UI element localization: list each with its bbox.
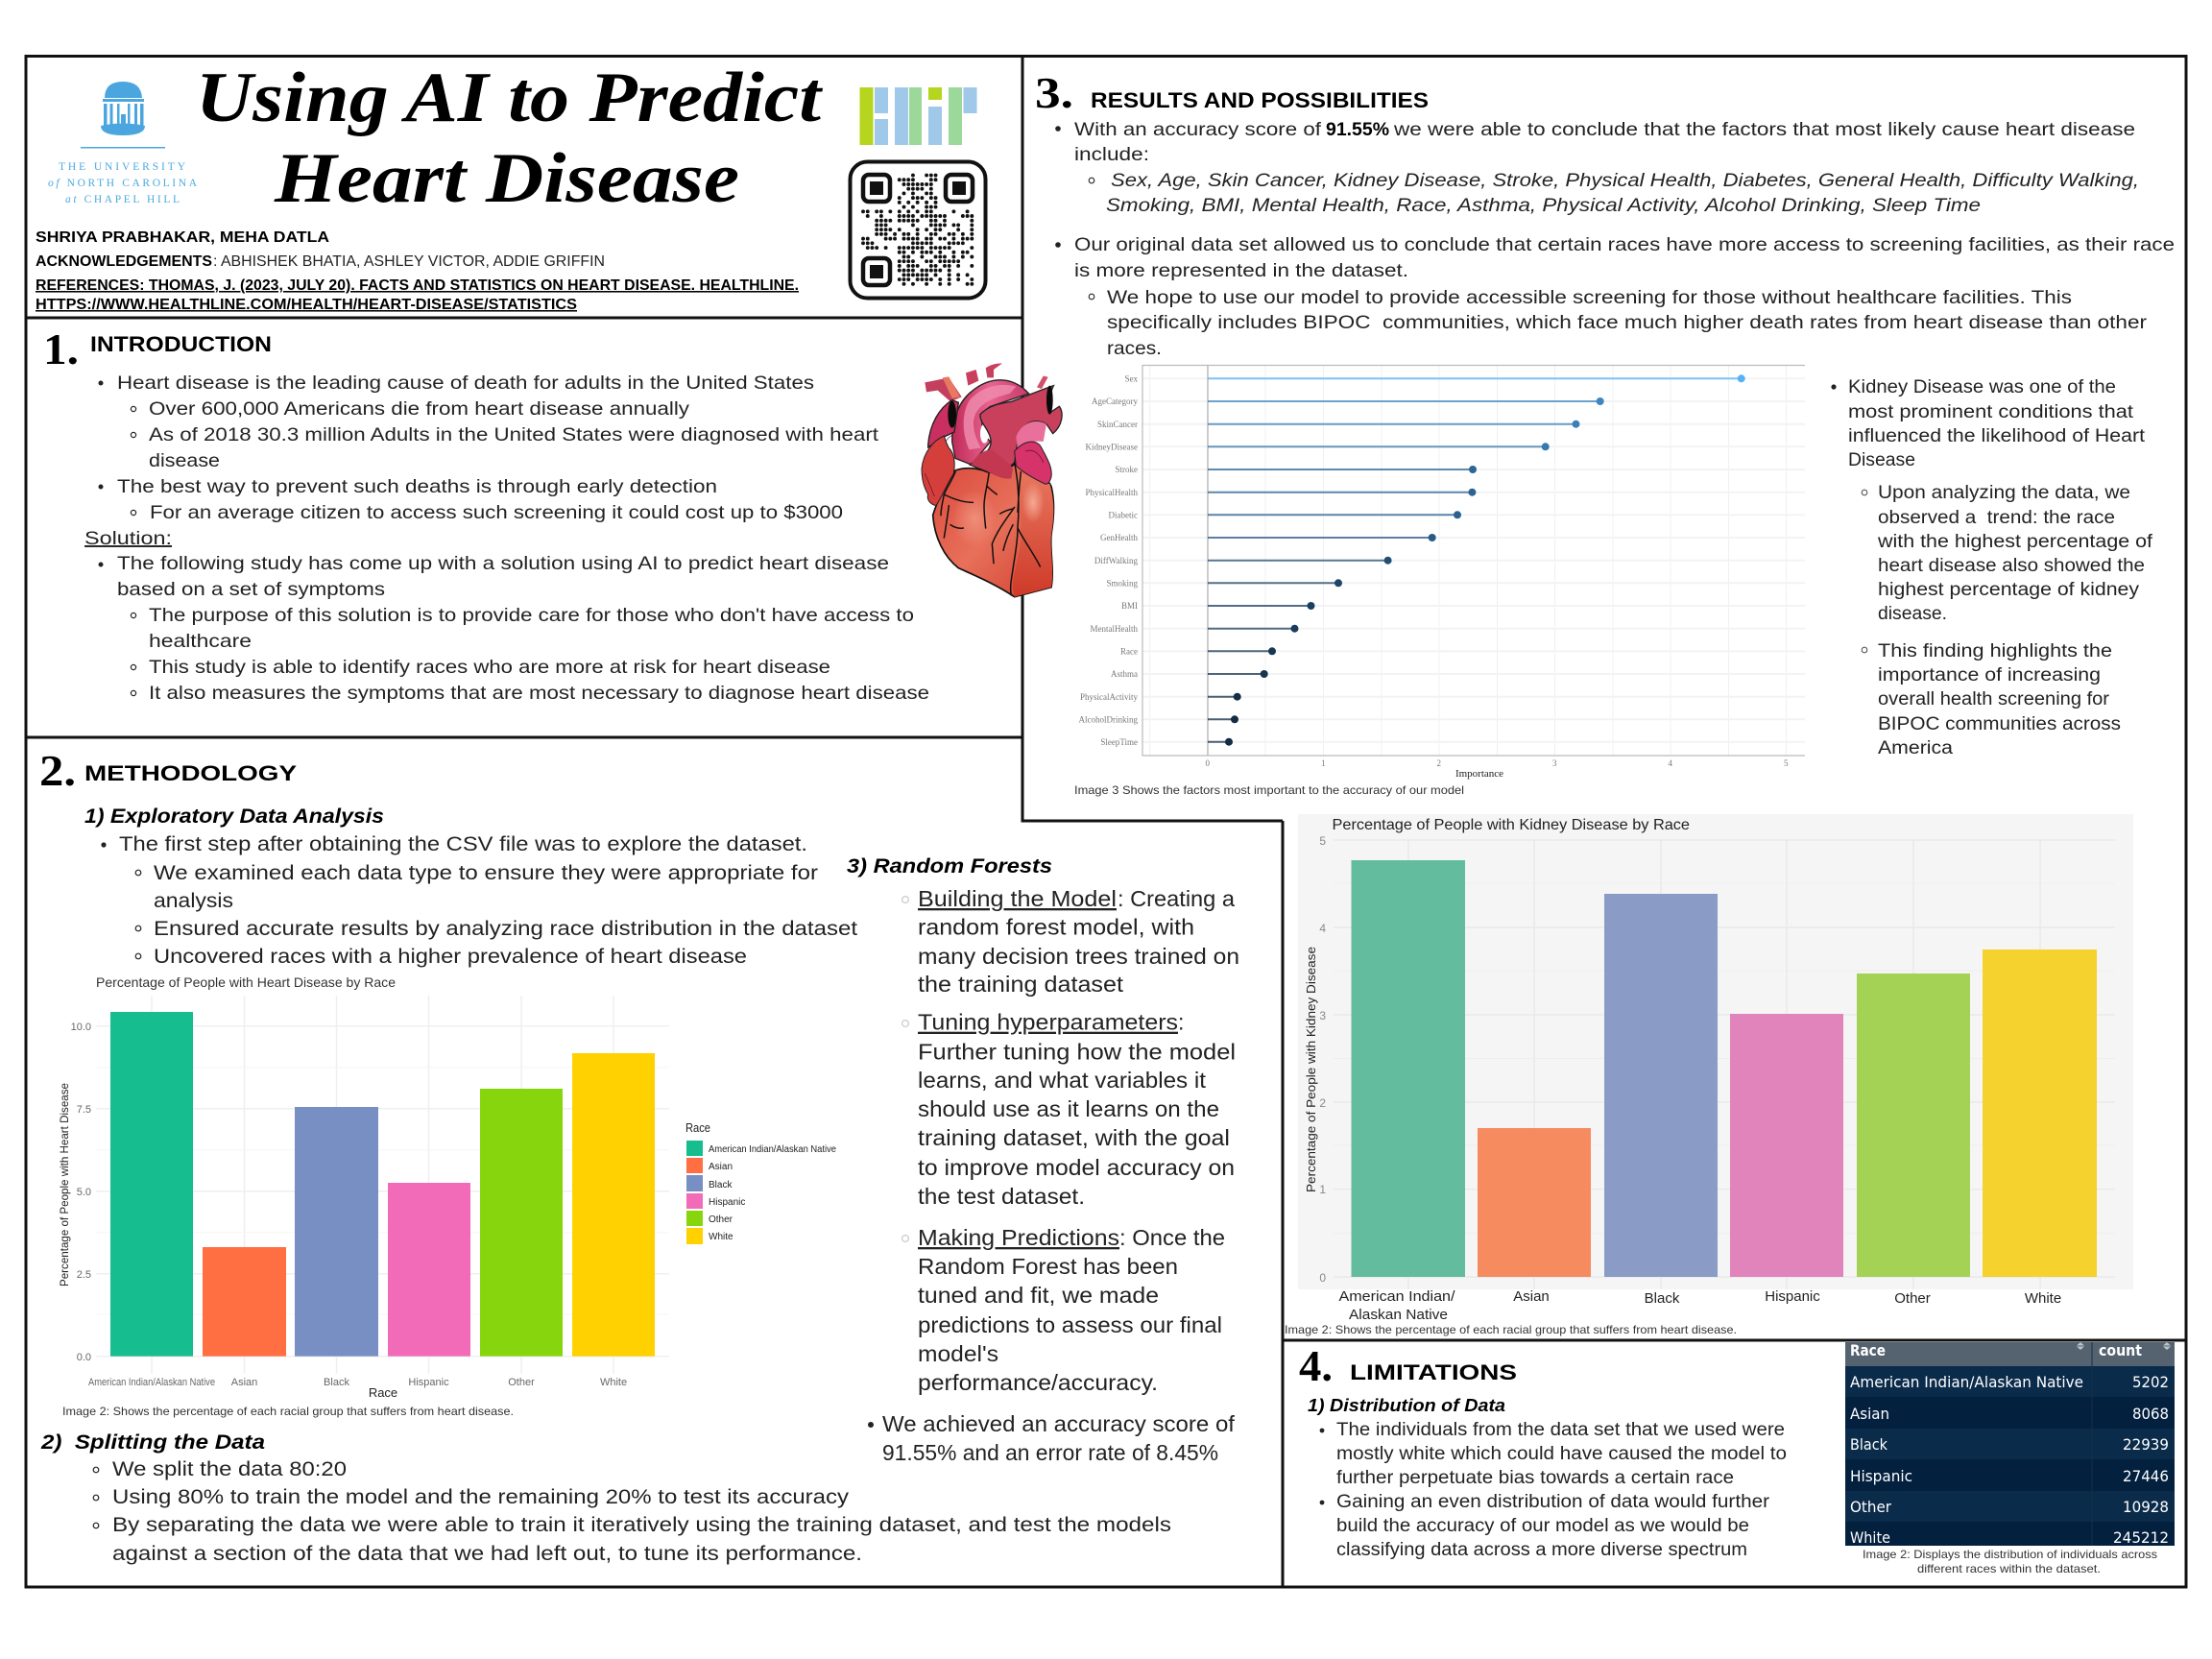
text block: results bullets: we were able to conclude that the factors that most likely cause heart disease — [1393, 119, 2135, 140]
text block: random forests bullets — [868, 886, 1239, 1465]
text block: splitting bullets: against a section of the data that we had left out, to tune its performance. — [112, 1542, 862, 1565]
text block: exploratory analysis bullets: Uncovered races with a higher prevalence of heart disease — [154, 945, 747, 968]
bar chart: heart disease by race: Race — [369, 1385, 397, 1400]
lollipop chart: feature importance: PhysicalHealth — [1085, 488, 1138, 497]
panel: introduction — [43, 325, 929, 704]
bar chart: kidney disease by race: Black — [1645, 1290, 1680, 1307]
lollipop chart: feature importance: GenHealth — [1100, 533, 1138, 542]
logo: UNC Old Well — [48, 82, 198, 205]
authors and references: REFERENCES: THOMAS, J. (2023, JULY 20). FACTS AND STATISTICS ON HEART DISEASE. HEALTHLINE. — [36, 277, 799, 294]
text block: random forests bullets: random forest model, with — [918, 914, 1194, 939]
text block: limitations bullets: further perpetuate bias towards a certain race — [1336, 1468, 1734, 1488]
subheading: random forests: 3) Random Forests — [847, 855, 1052, 878]
text block: introduction bullets: The following study has come up with a solution using AI to predict heart disease — [117, 553, 889, 574]
lollipop chart: feature importance: 1 — [1321, 758, 1325, 768]
bar chart: heart disease by race: American Indian/Alaskan Native — [88, 1377, 215, 1388]
lollipop chart: feature importance: 2 — [1436, 758, 1441, 768]
text block: results bullets: is more represented in the dataset. — [1074, 260, 1408, 281]
legend: White — [709, 1232, 733, 1242]
text block: kidney disease findings: observed a trend: the race — [1878, 508, 2115, 528]
text block: results bullets: specifically includes BIPOC communities, which face much higher death rates from heart disease than other — [1107, 312, 2148, 333]
text block: splitting bullets: We split the data 80:20 — [112, 1457, 347, 1480]
text block: kidney disease findings: importance of increasing — [1878, 665, 2101, 685]
text block: introduction bullets: Solution: — [84, 528, 172, 549]
text block: kidney disease findings — [1831, 377, 2153, 758]
text block: results bullets: Smoking, BMI, Mental Health, Race, Asthma, Physical Activity, Alcohol Drinking, Sleep Time — [1106, 195, 1981, 216]
bar chart: heart disease by race: Asian — [231, 1377, 257, 1388]
table: race counts: Asian — [1850, 1405, 1889, 1423]
table: race counts: 10928 — [2123, 1498, 2169, 1516]
text block: splitting bullets: By separating the data we were able to train it iteratively using the training dataset, and test the models — [112, 1513, 1171, 1536]
text block: kidney disease findings: heart disease also showed the — [1878, 556, 2145, 576]
bar chart: heart disease by race: 5.0 — [77, 1187, 91, 1198]
text block: kidney disease findings: Upon analyzing the data, we — [1878, 483, 2130, 503]
text block: random forests bullets: : Creating a — [1118, 886, 1235, 911]
text block: introduction bullets: healthcare — [149, 631, 252, 652]
legend — [685, 1120, 836, 1244]
text block: kidney disease findings: overall health screening for — [1878, 689, 2110, 709]
caption: kidney chart: Image 2: Shows the percentage of each racial group that suffers from heart disease. — [1285, 1323, 1737, 1336]
bar chart: kidney disease by race: Asian — [1513, 1288, 1550, 1305]
legend: Race — [685, 1120, 710, 1135]
legend: Black — [709, 1180, 733, 1190]
heading: results and possibilities: RESULTS AND POSSIBILITIES — [1091, 88, 1429, 112]
text block: kidney disease findings: Kidney Disease was one of the — [1848, 377, 2116, 397]
text block: introduction bullets: Heart disease is the leading cause of death for adults in the United States — [117, 373, 814, 394]
text block: introduction bullets: disease — [149, 450, 220, 471]
text block: kidney disease findings: Disease — [1848, 450, 1915, 470]
text block: exploratory analysis bullets: analysis — [154, 889, 233, 912]
lollipop chart: feature importance: Sex — [1125, 374, 1139, 384]
bar chart: kidney disease by race: American Indian/ — [1338, 1288, 1455, 1305]
table: race counts: White — [1850, 1528, 1890, 1547]
lollipop chart: feature importance — [1079, 365, 1805, 780]
text block: random forests bullets: to improve model accuracy on — [918, 1155, 1235, 1180]
table: race counts: 22939 — [2123, 1435, 2169, 1454]
bar chart: kidney disease by race: Percentage of People with Kidney Disease by Race — [1333, 817, 1690, 833]
logo: UNC Old Well: of NORTH CAROLINA — [48, 178, 198, 189]
text block: limitations bullets — [1320, 1420, 1787, 1560]
title — [196, 59, 824, 218]
text block: introduction bullets: This study is able to identify races who are more at risk for heart disease — [149, 657, 830, 678]
text block: random forests bullets: Making Predictions — [918, 1225, 1119, 1250]
text block: random forests bullets: training dataset, with the goal — [918, 1125, 1230, 1150]
text block: random forests bullets: We achieved an accuracy score of — [882, 1411, 1236, 1436]
text block: random forests bullets: the test dataset. — [918, 1184, 1085, 1209]
bar chart: heart disease by race — [58, 974, 836, 1400]
legend: Hispanic — [709, 1197, 745, 1208]
lollipop chart: feature importance: MentalHealth — [1091, 624, 1138, 634]
text block: random forests bullets: : Once the — [1119, 1225, 1225, 1250]
text block: random forests bullets: performance/accuracy. — [918, 1370, 1158, 1395]
text block: random forests bullets: learns, and what variables it — [918, 1068, 1207, 1093]
authors and references: : ABHISHEK BHATIA, ASHLEY VICTOR, ADDIE GRIFFIN — [213, 253, 605, 270]
text block: kidney disease findings: disease. — [1878, 604, 1947, 624]
text block: introduction bullets — [84, 373, 929, 704]
text block: exploratory analysis bullets: We examined each data type to ensure they were appropriate for — [154, 861, 818, 884]
text block: introduction bullets: As of 2018 30.3 million Adults in the United States were diagnosed with heart — [149, 424, 879, 445]
authors and references: ACKNOWLEDGEMENTS — [36, 253, 212, 270]
authors and references: HTTPS://WWW.HEALTHLINE.COM/HEALTH/HEART-DISEASE/STATISTICS — [36, 297, 577, 313]
text block: results bullets: Sex, Age, Skin Cancer, Kidney Disease, Stroke, Physical Health, Diabetes, General Health, Difficulty Walking, — [1111, 170, 2139, 191]
text block: kidney disease findings: most prominent conditions that — [1848, 402, 2134, 422]
section number 3: 3. — [1035, 68, 1073, 117]
QR code — [851, 161, 985, 298]
text block: random forests bullets: should use as it learns on the — [918, 1096, 1219, 1121]
text block: introduction bullets: For an average citizen to access such screening it could cost up to $3000 — [150, 502, 843, 523]
text block: limitations bullets: Gaining an even distribution of data would further — [1336, 1492, 1770, 1512]
table: race counts — [1845, 1341, 2175, 1547]
lollipop chart: feature importance: Stroke — [1116, 465, 1138, 474]
text block: results bullets: include: — [1074, 144, 1149, 165]
title: Using AI to Predict — [196, 59, 824, 137]
heading: limitations: LIMITATIONS — [1350, 1360, 1517, 1384]
text block: kidney disease findings: influenced the likelihood of Heart — [1848, 426, 2146, 446]
table: race counts: Other — [1850, 1498, 1891, 1516]
bar chart: kidney disease by race: White — [2025, 1290, 2061, 1307]
logo: UNC Old Well: at CHAPEL HILL — [65, 194, 180, 205]
authors and references — [36, 229, 799, 313]
bar chart: heart disease by race: White — [600, 1377, 627, 1388]
bar chart: heart disease by race: 10.0 — [71, 1022, 91, 1033]
text block: random forests bullets: tuned and fit, we made — [918, 1283, 1159, 1308]
text block: random forests bullets: model's — [918, 1341, 998, 1366]
text block: introduction bullets: based on a set of symptoms — [117, 579, 385, 600]
subheading: splitting the data: 2) Splitting the Data — [40, 1431, 265, 1454]
caption: heart disease chart: Image 2: Shows the percentage of each racial group that suffers from heart disease. — [62, 1405, 514, 1418]
panel: limitations — [1299, 1341, 2175, 1575]
text block: limitations bullets: classifying data across a more diverse spectrum — [1336, 1540, 1747, 1560]
text block: results bullets: races. — [1107, 338, 1162, 359]
table: race counts: 27446 — [2123, 1467, 2169, 1485]
bar chart: kidney disease by race: Percentage of People with Kidney Disease — [1304, 947, 1318, 1192]
lollipop chart: feature importance: KidneyDisease — [1086, 442, 1138, 451]
heading: introduction: INTRODUCTION — [90, 332, 272, 356]
bar chart: kidney disease by race: 0 — [1319, 1271, 1326, 1285]
table: race counts: 245212 — [2113, 1528, 2169, 1547]
text block: kidney disease findings: BIPOC communities across — [1878, 714, 2121, 734]
caption: table: different races within the dataset. — [1917, 1562, 2101, 1575]
text block: results bullets: 91.55% — [1326, 119, 1389, 140]
bar chart: heart disease by race: Other — [508, 1377, 535, 1388]
heart illustration — [922, 363, 1062, 597]
bar chart: kidney disease by race: 5 — [1319, 834, 1326, 848]
subheading: distribution of data: 1) Distribution of Data — [1308, 1395, 1505, 1415]
panel: methodology — [39, 746, 1239, 1565]
bar chart: kidney disease by race: 1 — [1319, 1183, 1326, 1196]
legend: American Indian/Alaskan Native — [709, 1144, 836, 1155]
logo: UNC Old Well: THE UNIVERSITY — [59, 161, 186, 173]
caption: table: Image 2: Displays the distribution of individuals across — [1863, 1548, 2157, 1561]
table: race counts: 5202 — [2132, 1373, 2169, 1391]
bar chart: heart disease by race: 7.5 — [77, 1104, 91, 1116]
text block: random forests bullets: 91.55% and an error rate of 8.45% — [882, 1440, 1218, 1465]
section number 4: 4. — [1299, 1341, 1333, 1390]
text block: random forests bullets: the training dataset — [918, 972, 1124, 997]
bar chart: kidney disease by race: 2 — [1319, 1096, 1326, 1110]
lollipop chart: feature importance: SleepTime — [1100, 737, 1138, 747]
lollipop chart: feature importance: Race — [1120, 647, 1138, 657]
text block: results bullets: With an accuracy score of — [1074, 119, 1322, 140]
text block: random forests bullets: many decision trees trained on — [918, 944, 1239, 969]
bar chart: heart disease by race: 2.5 — [77, 1269, 91, 1281]
caption: feature importance chart: Image 3 Shows the factors most important to the accuracy of our model — [1074, 783, 1464, 797]
title: Heart Disease — [274, 139, 739, 218]
lollipop chart: feature importance: SkinCancer — [1097, 420, 1138, 429]
panel: results and possibilities — [1035, 68, 2175, 797]
section number 2: 2. — [39, 746, 76, 795]
text block: introduction bullets: The purpose of this solution is to provide care for those who don't have access to — [149, 605, 914, 626]
table: race counts: Hispanic — [1850, 1467, 1912, 1485]
text block: introduction bullets: Over 600,000 Americans die from heart disease annually — [149, 398, 689, 420]
text block: limitations bullets: build the accuracy of our model as we would be — [1336, 1516, 1749, 1536]
bar chart: kidney disease by race — [1298, 814, 2133, 1323]
text block: random forests bullets: Building the Model — [918, 886, 1117, 911]
lollipop chart: feature importance: Asthma — [1111, 669, 1138, 679]
section number 1: 1. — [43, 325, 79, 373]
bar chart: heart disease by race: Black — [324, 1377, 349, 1388]
panel: header — [36, 59, 985, 313]
subheading: exploratory data analysis: 1) Exploratory Data Analysis — [84, 805, 384, 828]
bar chart: kidney disease by race: Other — [1894, 1290, 1931, 1307]
text block: random forests bullets: Random Forest has been — [918, 1254, 1178, 1279]
text block: random forests bullets: predictions to assess our final — [918, 1312, 1222, 1337]
text block: random forests bullets: Tuning hyperparameters — [918, 1010, 1178, 1035]
lollipop chart: feature importance: AgeCategory — [1092, 397, 1138, 406]
text block: results bullets: We hope to use our model to provide accessible screening for those without healthcare facilities. This — [1107, 287, 2072, 308]
legend: Asian — [709, 1162, 733, 1172]
text block: kidney disease findings: America — [1878, 738, 1953, 758]
lollipop chart: feature importance: 4 — [1669, 758, 1672, 768]
text block: exploratory analysis bullets — [101, 832, 857, 968]
lollipop chart: feature importance: Diabetic — [1108, 511, 1138, 520]
lollipop chart: feature importance: PhysicalActivity — [1080, 692, 1138, 702]
lollipop chart: feature importance: 3 — [1552, 758, 1557, 768]
table: race counts: count — [2099, 1341, 2142, 1359]
bar chart: kidney disease by race: Hispanic — [1765, 1288, 1820, 1305]
text block: kidney disease findings: This finding highlights the — [1878, 641, 2112, 661]
bar chart: heart disease by race: 0.0 — [77, 1352, 91, 1363]
lollipop chart: feature importance: AlcoholDrinking — [1079, 714, 1138, 724]
bar chart: kidney disease by race: Alaskan Native — [1349, 1307, 1448, 1323]
text block: results bullets — [1055, 119, 2175, 359]
text block: random forests bullets: Further tuning how the model — [918, 1039, 1236, 1064]
legend: Other — [709, 1214, 733, 1225]
bar chart: kidney disease by race: 3 — [1319, 1009, 1326, 1022]
lollipop chart: feature importance: Smoking — [1106, 578, 1138, 588]
table: race counts: American Indian/Alaskan Native — [1850, 1373, 2083, 1391]
bar chart: heart disease by race: Percentage of People with Heart Disease by Race — [96, 974, 396, 990]
text block: random forests bullets: : — [1178, 1010, 1184, 1035]
text block: limitations bullets: The individuals from the data set that we used were — [1336, 1420, 1785, 1440]
text block: kidney disease findings: with the highest percentage of — [1877, 532, 2153, 552]
lollipop chart: feature importance: Importance — [1455, 768, 1503, 780]
caption: table — [1863, 1548, 2157, 1575]
text block: limitations bullets: mostly white which could have caused the model to — [1336, 1444, 1787, 1464]
lollipop chart: feature importance: DiffWalking — [1094, 556, 1138, 565]
bar chart: heart disease by race: Hispanic — [408, 1377, 449, 1388]
table: race counts: Race — [1850, 1341, 1886, 1359]
lollipop chart: feature importance: 0 — [1206, 758, 1210, 768]
lollipop chart: feature importance: BMI — [1121, 601, 1138, 611]
text block: introduction bullets: It also measures the symptoms that are most necessary to diagnose heart disease — [149, 683, 929, 704]
text block: splitting bullets: Using 80% to train the model and the remaining 20% to test its accuracy — [112, 1485, 849, 1508]
bar chart: heart disease by race: Percentage of People with Heart Disease — [58, 1083, 71, 1286]
text block: splitting bullets — [93, 1457, 1171, 1565]
logo: coloured bars — [860, 87, 977, 145]
heading: methodology: METHODOLOGY — [84, 761, 297, 785]
table: race counts: 8068 — [2132, 1405, 2169, 1423]
text block: introduction bullets: The best way to prevent such deaths is through early detection — [117, 476, 717, 497]
lollipop chart: feature importance: 5 — [1784, 758, 1789, 768]
bar chart: kidney disease by race: 4 — [1319, 922, 1326, 935]
text block: results bullets: Our original data set allowed us to conclude that certain races have more access to screening facilities, as their race — [1074, 234, 2175, 255]
table: race counts: Black — [1850, 1435, 1888, 1454]
text block: kidney disease findings: highest percentage of kidney — [1878, 580, 2140, 600]
authors and references: SHRIYA PRABHAKAR, MEHA DATLA — [36, 229, 329, 246]
text block: exploratory analysis bullets: Ensured accurate results by analyzing race distribution in the dataset — [154, 917, 857, 940]
text block: exploratory analysis bullets: The first step after obtaining the CSV file was to explore the dataset. — [119, 832, 807, 855]
